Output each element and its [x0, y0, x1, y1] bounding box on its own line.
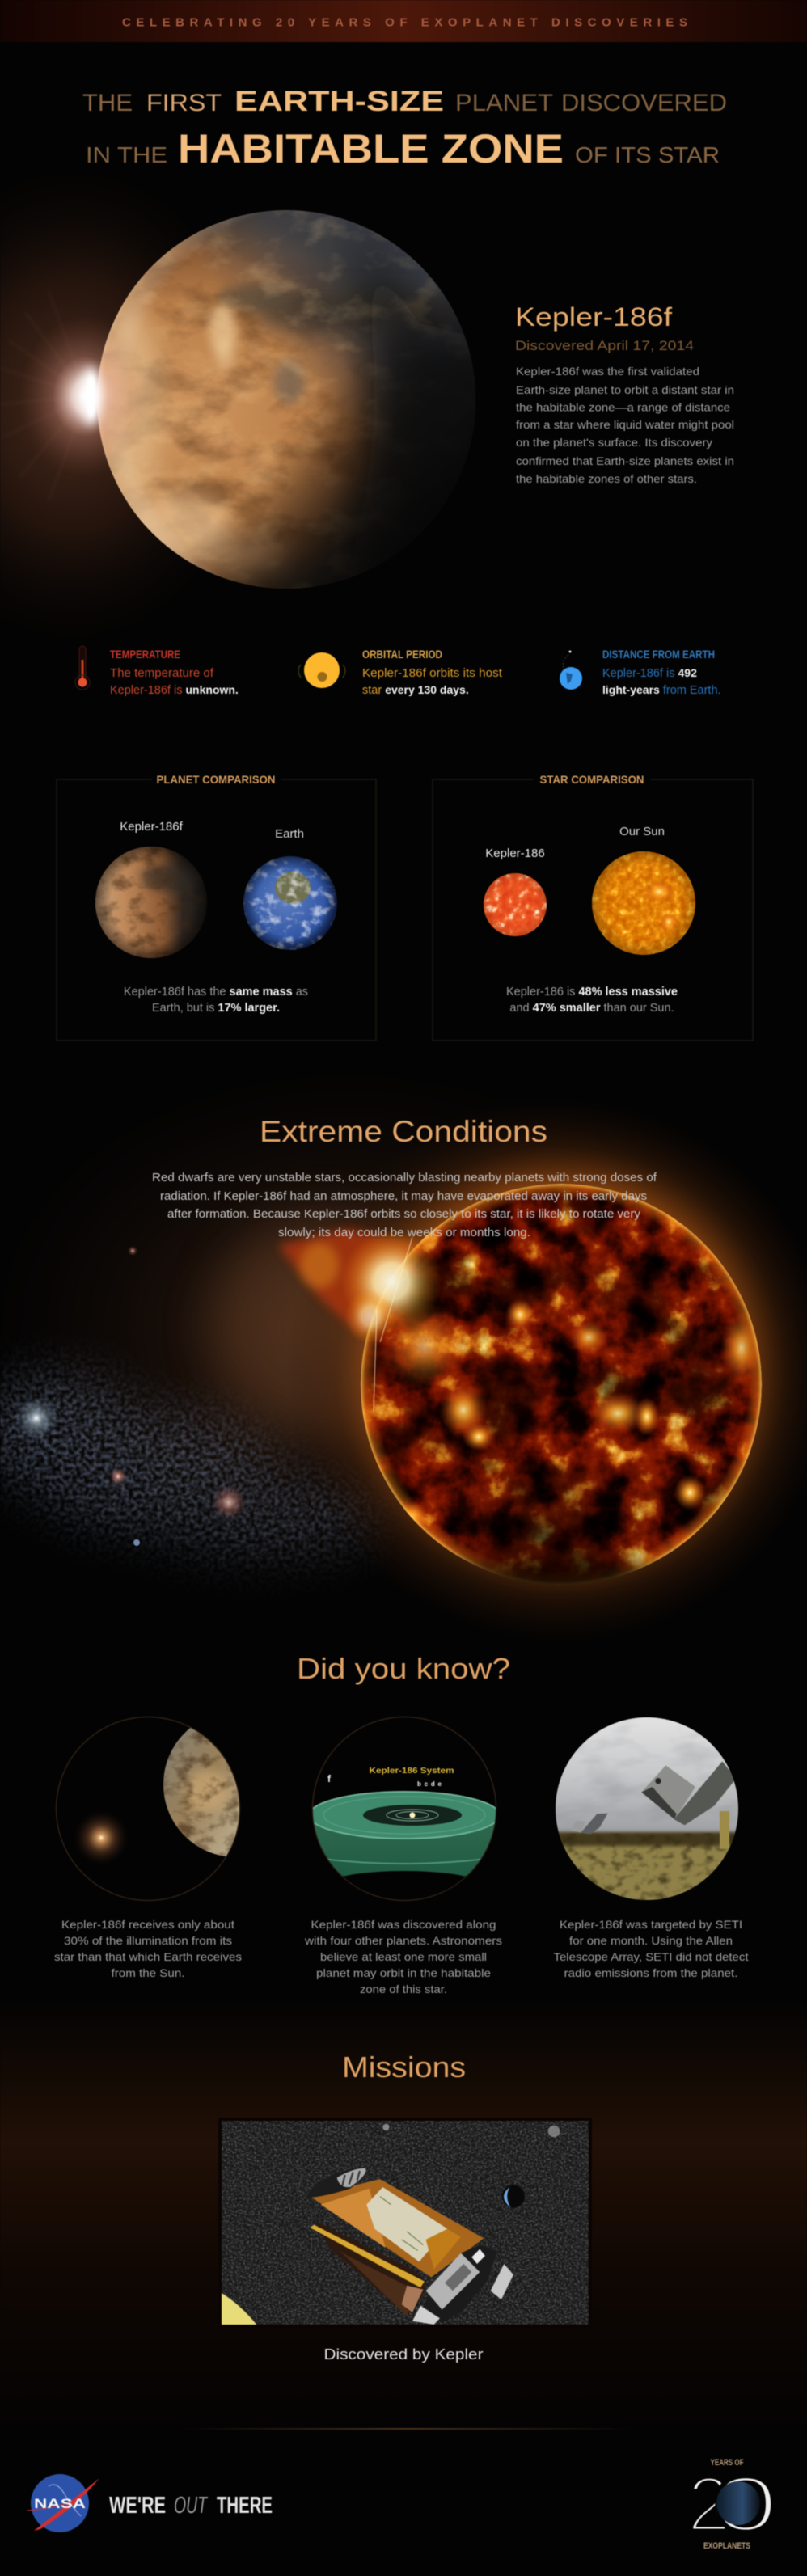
description paragraph: confirmed that Earth-size planets exist in	[516, 454, 734, 467]
panel heading: STAR COMPARISON	[540, 773, 644, 786]
planet f marker: f	[327, 1773, 332, 1784]
star: Kepler-186	[484, 873, 547, 936]
fact text: Kepler-186f receives only about	[61, 1918, 234, 1931]
main title	[82, 86, 727, 171]
stat: distance from earth: DISTANCE FROM EARTH	[602, 648, 715, 661]
description paragraph: the habitable zone—a range of distance	[516, 401, 730, 414]
star glow halo	[286, 1096, 807, 1645]
discovery date: Discovered April 17, 2014	[515, 338, 694, 353]
main title: FIRST	[146, 90, 222, 116]
stat: temperature	[75, 646, 239, 697]
main title: HABITABLE ZONE	[178, 126, 564, 171]
extreme conditions paragraph: after formation. Because Kepler-186f orbits so closely to its star, it is likely to rotate very	[167, 1208, 641, 1221]
illustration: Kepler spacecraft	[218, 2118, 592, 2328]
tagline: We're out there: THERE	[217, 2493, 273, 2519]
tagline: We're out there: WE'RE	[109, 2493, 166, 2519]
star flare	[0, 291, 150, 501]
panel: planet comparison	[57, 773, 376, 1041]
star caption: and 47% smaller than our Sun.	[509, 1002, 674, 1015]
fact text: Telescope Array, SETI did not detect	[553, 1950, 749, 1963]
description paragraph: on the planet's surface. Its discovery	[516, 436, 712, 449]
planet name: Kepler-186f	[515, 302, 672, 332]
stat: temperature: TEMPERATURE	[110, 648, 180, 661]
stat: orbital period: Kepler-186f orbits its host	[362, 667, 502, 680]
star caption: Kepler-186 is 48% less massive	[506, 986, 678, 999]
fact text	[54, 1918, 242, 1979]
illustration: Kepler-186f planet	[97, 210, 475, 589]
nebula glow	[0, 1051, 728, 1601]
main title: PLANET	[455, 90, 553, 116]
description paragraph: Kepler-186f was the first validated	[516, 365, 699, 378]
stat: orbital period: star every 130 days.	[362, 683, 469, 697]
label: Kepler-186f: Kepler-186f	[120, 820, 184, 834]
logo: 20 years of exoplanets	[687, 2458, 778, 2551]
circle image: planet and star	[57, 1714, 247, 1900]
main title: OF ITS STAR	[575, 142, 720, 167]
header banner: CELEBRATING 20 YEARS OF EXOPLANET DISCOVERIES	[122, 16, 687, 29]
panel heading: PLANET COMPARISON	[157, 773, 275, 786]
section heading: Extreme Conditions: Extreme Conditions	[260, 1115, 547, 1148]
main title: THE	[82, 90, 133, 116]
fact text: planet may orbit in the habitable	[316, 1966, 491, 1979]
main title: IN THE	[86, 142, 167, 167]
hero glow behind planet	[0, 146, 275, 663]
tagline: We're out there: OUT	[174, 2493, 209, 2519]
label: Earth: Earth	[275, 827, 304, 841]
logo: NASA: NASA	[34, 2496, 86, 2511]
fact text: radio emissions from the planet.	[564, 1966, 737, 1979]
solar flare prominence	[278, 1229, 420, 1334]
circle image: habitable zone diagram	[309, 1717, 500, 1900]
fact text: Kepler-186f was targeted by SETI	[560, 1918, 742, 1931]
fact text: from the Sun.	[112, 1966, 184, 1979]
logo: 20 years of exoplanets: 0	[713, 2460, 778, 2547]
footer divider	[180, 2428, 633, 2430]
header banner	[0, 0, 807, 42]
fact text: believe at least one more small	[320, 1950, 487, 1963]
section heading: Did you know?: Did you know?	[297, 1652, 510, 1685]
fact text: for one month. Using the Allen	[569, 1934, 733, 1947]
label: Our Sun: Our Sun	[619, 825, 665, 838]
galaxy star field	[0, 1247, 380, 1580]
fact text: star than that which Earth receives	[54, 1950, 242, 1963]
planet: Earth	[243, 856, 337, 950]
fact text: with four other planets. Astronomers	[304, 1934, 502, 1947]
fact 2: Kepler-186 system	[304, 1717, 502, 1995]
illustration: extreme conditions background	[0, 1114, 807, 1625]
planet letters: b c d e	[417, 1780, 442, 1788]
planet caption	[124, 986, 308, 1015]
stat: orbital period: ORBITAL PERIOD	[362, 648, 442, 661]
circle image: Allen Telescope Array	[556, 1717, 738, 1906]
icon: orbit	[298, 652, 345, 688]
description paragraph: the habitable zones of other stars.	[516, 472, 697, 485]
planet: Kepler-186f	[95, 847, 207, 958]
planet description	[515, 302, 734, 485]
extreme conditions paragraph: slowly; its day could be weeks or months long.	[278, 1227, 530, 1239]
fact text	[553, 1918, 749, 1979]
description paragraph: Earth-size planet to orbit a distant star in	[516, 383, 734, 396]
logo: 20 years of exoplanets: YEARS OF	[710, 2458, 744, 2468]
icon: thermometer	[75, 646, 90, 690]
fact 1: dim illumination	[54, 1714, 247, 1979]
logo: 20 years of exoplanets: EXOPLANETS	[703, 2541, 750, 2551]
fact text: 30% of the illumination from its	[64, 1934, 232, 1947]
description paragraph	[516, 365, 734, 485]
description paragraph: from a star where liquid water might pool	[516, 418, 734, 431]
extreme conditions paragraph: Red dwarfs are very unstable stars, occasionally blasting nearby planets with strong doses of	[152, 1172, 657, 1185]
planet caption: Earth, but is 17% larger.	[152, 1002, 280, 1015]
fact text: Kepler-186f was discovered along	[311, 1918, 496, 1931]
stat: temperature: Kepler-186f is unknown.	[110, 683, 239, 697]
stat: distance from earth: light-years from Earth.	[602, 683, 721, 697]
fact text: zone of this star.	[360, 1983, 447, 1995]
caption: Discovered by Kepler: Discovered by Kepler	[323, 2346, 484, 2363]
extreme conditions paragraph	[152, 1172, 657, 1239]
planet caption: Kepler-186f has the same mass as	[124, 986, 308, 999]
stat: distance from earth	[560, 648, 721, 697]
label: Kepler-186: Kepler-186	[485, 847, 545, 860]
logo: NASA	[27, 2474, 99, 2532]
logo: 20 years of exoplanets: 2	[687, 2461, 730, 2548]
extreme conditions paragraph: radiation. If Kepler-186f had an atmosphere, it may have evaporated away in its early days	[160, 1190, 647, 1203]
stat: distance from earth: Kepler-186f is 492	[602, 666, 697, 680]
tagline: We're out there	[109, 2493, 273, 2519]
missions background glow	[0, 1997, 807, 2450]
section heading: Missions: Missions	[342, 2050, 466, 2084]
main title: DISCOVERED	[561, 90, 727, 116]
icon: earth and star	[560, 650, 582, 690]
red dwarf star	[275, 1183, 763, 1585]
star caption	[506, 986, 678, 1015]
stat: orbital period	[298, 648, 502, 697]
flare burst	[341, 1230, 442, 1411]
panel: star comparison	[433, 773, 753, 1041]
stat: temperature: The temperature of	[110, 667, 214, 680]
fact text	[304, 1918, 502, 1995]
diagram label: Kepler-186 System	[369, 1766, 454, 1776]
main title: EARTH-SIZE	[234, 86, 444, 117]
fact 3: SETI radio search	[553, 1717, 749, 1979]
star: our Sun	[592, 851, 695, 955]
